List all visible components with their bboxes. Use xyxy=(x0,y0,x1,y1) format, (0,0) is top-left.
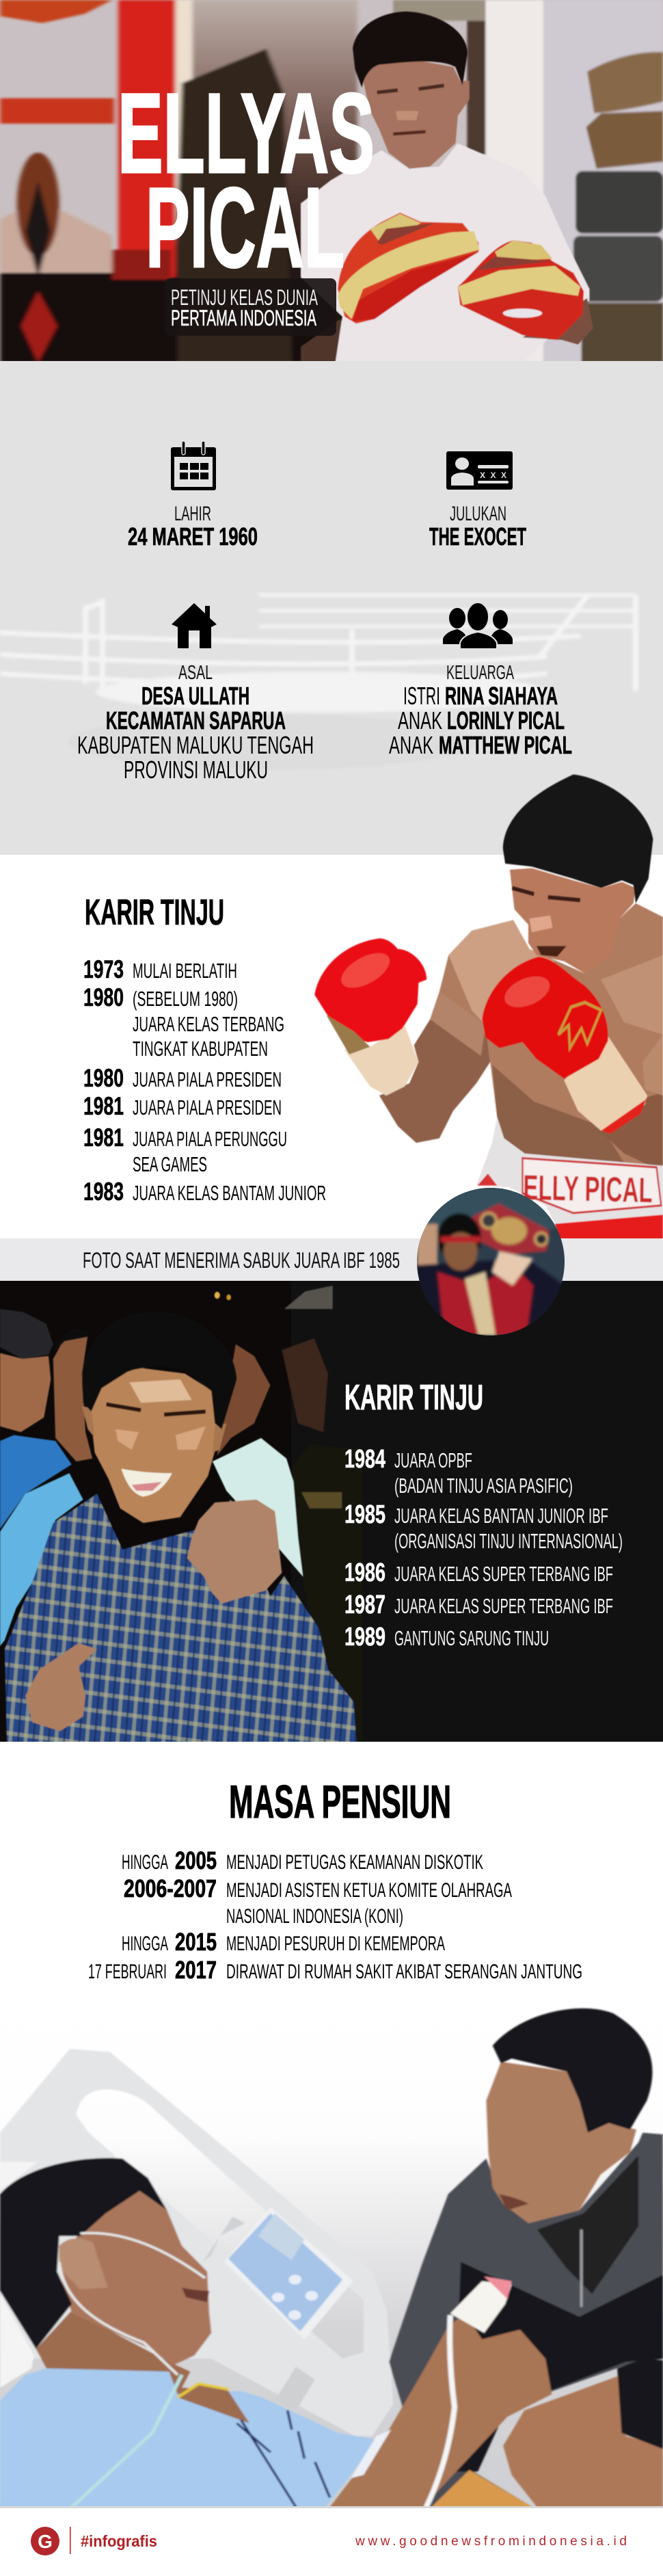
text block: julukan: THE EXOCET xyxy=(429,522,526,550)
panel: dark career section xyxy=(0,1279,663,1749)
text block: retirement timeline: 2006-2007 xyxy=(124,1874,217,1902)
text block: career timeline 1973-1983: 1983 xyxy=(83,1178,124,1206)
title: Ellyas Pical: ELLYAS xyxy=(118,70,375,197)
panel: footer: #infografis xyxy=(81,2532,157,2550)
text block: retirement timeline xyxy=(88,1846,582,1984)
text block: keluarga: KELUARGA xyxy=(446,662,514,684)
text block: career timeline 1984-1989: JUARA OPBF xyxy=(394,1448,472,1472)
text block: asal: DESA ULLATH xyxy=(141,682,249,710)
icon: id card xyxy=(446,451,513,490)
text block: career timeline 1973-1983: JUARA PIALA PRESIDEN xyxy=(133,1096,282,1119)
text block: keluarga: ANAK xyxy=(389,731,433,759)
icon: family xyxy=(443,602,513,649)
text block: career timeline 1973-1983: 1973 xyxy=(83,955,124,983)
icon: calendar xyxy=(171,441,216,490)
panel: biography section background xyxy=(0,361,663,855)
subtitle box: PETINJU KELAS DUNIA xyxy=(171,285,318,310)
text block: julukan: JULUKAN xyxy=(450,503,506,525)
text block: asal: PROVINSI MALUKU xyxy=(124,756,268,784)
text block: keluarga xyxy=(389,662,572,759)
text block: retirement timeline: NASIONAL INDONESIA (KONI) xyxy=(226,1905,403,1928)
caption band xyxy=(0,1238,663,1281)
text block: lahir xyxy=(128,503,258,550)
text block: career timeline 1973-1983: TINGKAT KABUPATEN xyxy=(133,1037,268,1061)
title: Ellyas Pical xyxy=(118,70,375,291)
text block: retirement timeline: 2017 xyxy=(175,1956,217,1984)
text block: keluarga: ISTRI xyxy=(403,682,440,710)
text block: career timeline 1973-1983 xyxy=(83,955,326,1206)
text block: keluarga: LORINLY PICAL xyxy=(447,706,565,734)
text block: career timeline 1973-1983: JUARA KELAS BANTAM JUNIOR xyxy=(133,1181,326,1205)
heading: karir tinju: KARIR TINJU xyxy=(85,892,224,933)
text block: career timeline 1973-1983: MULAI BERLATIH xyxy=(133,959,237,983)
text block: career timeline 1973-1983: JUARA PIALA PERUNGGU xyxy=(133,1127,287,1151)
text block: asal: KABUPATEN MALUKU TENGAH xyxy=(77,731,314,759)
text block: lahir: 24 MARET 1960 xyxy=(128,522,258,550)
text block: keluarga: ANAK xyxy=(398,706,442,734)
text block: career timeline 1973-1983: JUARA KELAS TERBANG xyxy=(133,1012,284,1036)
subtitle box xyxy=(165,278,336,336)
text block: asal xyxy=(77,662,314,784)
text block: julukan xyxy=(429,503,526,550)
panel: early career white background xyxy=(0,855,663,1238)
text block: career timeline 1984-1989: 1987 xyxy=(344,1591,385,1619)
photo: celebrating boxer in plaid shirt xyxy=(0,1279,362,1749)
icon: logo xyxy=(31,2527,59,2555)
panel: hero photo xyxy=(0,0,663,362)
subtitle box: PERTAMA INDONESIA xyxy=(171,306,316,330)
text block: retirement timeline: HINGGA xyxy=(122,1933,168,1955)
text block: retirement timeline: 2005 xyxy=(175,1846,217,1874)
boxing ring faded photo xyxy=(0,595,636,769)
text block: career timeline 1973-1983: 1980 xyxy=(83,1064,124,1092)
text block: career timeline 1973-1983: 1981 xyxy=(83,1092,124,1120)
text block: career timeline 1984-1989: 1986 xyxy=(344,1558,385,1587)
text block: retirement timeline: MENJADI PESURUH DI KEMEMPORA xyxy=(226,1933,445,1955)
text block: career timeline 1973-1983: (SEBELUM 1980) xyxy=(133,987,238,1011)
text block: career timeline 1973-1983: JUARA PIALA PRESIDEN xyxy=(133,1067,282,1091)
text block: career timeline 1973-1983: 1980 xyxy=(83,983,124,1011)
text block: lahir: LAHIR xyxy=(174,503,211,525)
panel: footer: www.goodnewsfromindonesia.id xyxy=(355,2534,627,2549)
icon: house xyxy=(172,603,217,648)
icon: id card: XXX xyxy=(480,470,506,480)
hero person with focus pads and tyres xyxy=(301,0,663,362)
icon: logo: G xyxy=(38,2531,53,2552)
panel: footer xyxy=(0,2506,663,2555)
text block: retirement timeline: HINGGA xyxy=(122,1851,168,1874)
text block: asal: KECAMATAN SAPARUA xyxy=(106,706,286,734)
heading: karir tinju (dark section): KARIR TINJU xyxy=(344,1378,483,1418)
title: Ellyas Pical: PICAL xyxy=(146,165,344,291)
text block: retirement timeline: MENJADI PETUGAS KEAMANAN DISKOTIK xyxy=(226,1851,483,1874)
photo: boxer with red gloves xyxy=(314,774,663,1239)
text block: keluarga: MATTHEW PICAL xyxy=(439,731,572,759)
hero background left gym xyxy=(0,0,357,362)
text block: retirement timeline: 2015 xyxy=(175,1928,217,1956)
photo: hospital bed scene xyxy=(0,1984,663,2514)
heading: masa pensiun: MASA PENSIUN xyxy=(229,1776,451,1828)
text block: career timeline 1973-1983: 1981 xyxy=(83,1124,124,1152)
photo: receiving IBF belt circle xyxy=(417,1188,565,1336)
text block: career timeline 1973-1983: SEA GAMES xyxy=(133,1152,207,1176)
caption band: FOTO SAAT MENERIMA SABUK JUARA IBF 1985 xyxy=(83,1248,400,1273)
text block: career timeline 1984-1989: 1985 xyxy=(344,1500,385,1529)
text block: career timeline 1984-1989: 1984 xyxy=(344,1445,385,1474)
text block: retirement timeline: 17 FEBRUARI xyxy=(88,1961,167,1983)
text block: career timeline 1984-1989: 1989 xyxy=(344,1623,385,1651)
text block: career timeline 1984-1989: GANTUNG SARUNG TINJU xyxy=(394,1626,549,1650)
text block: asal: ASAL xyxy=(178,662,213,684)
text block: career timeline 1984-1989 xyxy=(344,1445,623,1651)
text block: keluarga: RINA SIAHAYA xyxy=(445,682,558,710)
